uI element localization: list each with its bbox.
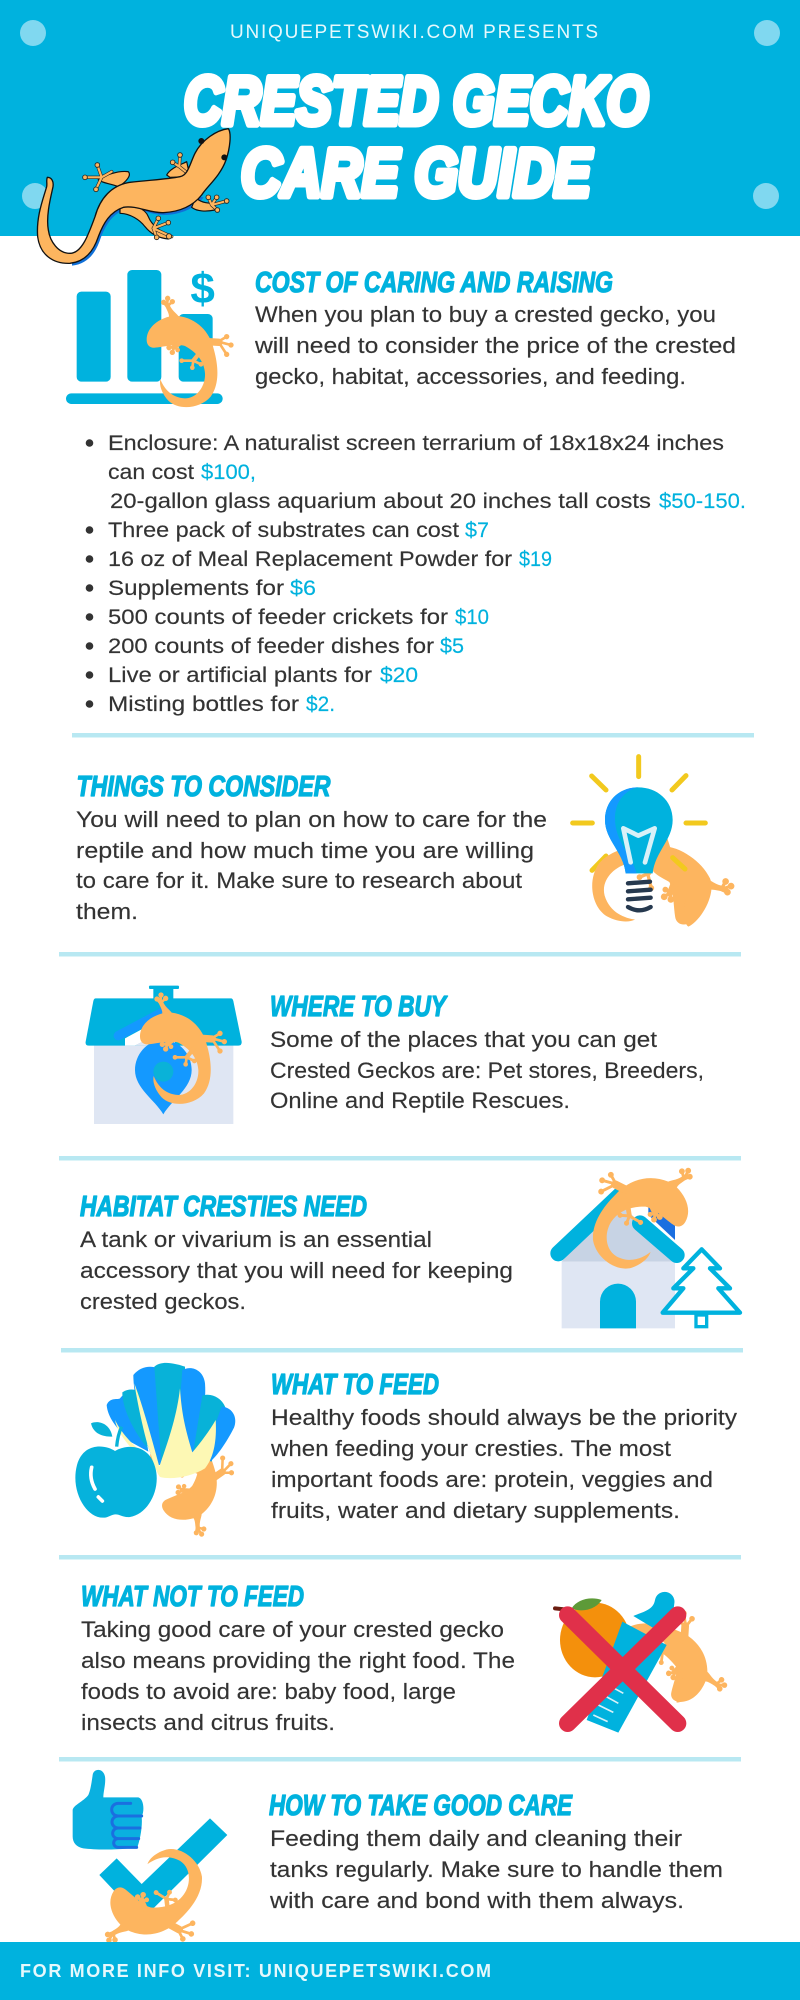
panel: things to consider bbox=[76, 757, 741, 944]
icon: house with location pin and gecko bbox=[86, 986, 242, 1124]
price list: Enclosure: A naturalist screen terrarium of 18x18x24 inches bbox=[108, 432, 724, 455]
price list: $5 bbox=[440, 635, 464, 658]
body text: what not to feed: foods to avoid are: baby food, large bbox=[81, 1679, 456, 1704]
icon: house, tree and gecko bbox=[558, 1132, 740, 1328]
body text: habitat: accessory that you will need for keeping bbox=[80, 1258, 513, 1283]
heading: habitat: HABITAT CRESTIES NEED bbox=[80, 1191, 367, 1223]
body text: what not to feed: Taking good care of your crested gecko bbox=[81, 1617, 504, 1642]
body text: where to buy: Some of the places that you can get bbox=[270, 1027, 658, 1052]
footer text: FOR MORE INFO VISIT: UNIQUEPETSWIKI.COM bbox=[20, 1961, 491, 1981]
body text: what to feed: fruits, water and dietary supplements. bbox=[271, 1498, 680, 1523]
body text: habitat bbox=[80, 1227, 513, 1314]
panel: cost of caring and raising bbox=[66, 264, 746, 716]
body text: cost intro bbox=[254, 302, 736, 389]
price list: Misting bottles for bbox=[108, 693, 299, 716]
icon: bar chart with dollar and gecko: $ bbox=[190, 264, 215, 313]
body text: where to buy bbox=[270, 1027, 704, 1113]
body text: what to feed: when feeding your cresties. The most bbox=[270, 1436, 672, 1461]
presenter line: UNIQUEPETSWIKI.COM PRESENTS bbox=[230, 22, 598, 43]
panel: habitat cresties need bbox=[80, 1132, 740, 1328]
header banner bbox=[0, 0, 800, 236]
price list: $19 bbox=[519, 548, 552, 571]
icon: apple, lettuce and gecko bbox=[75, 1363, 258, 1547]
body text: things to consider: them. bbox=[76, 899, 138, 924]
price list: Three pack of substrates can cost bbox=[108, 519, 459, 542]
price list: Live or artificial plants for bbox=[108, 664, 372, 687]
price list: $100, bbox=[201, 461, 256, 484]
panel: what to feed bbox=[75, 1363, 738, 1547]
title: CARE GUIDE bbox=[241, 135, 593, 211]
heading: things to consider: THINGS TO CONSIDER bbox=[76, 771, 331, 803]
heading: how to take good care: HOW TO TAKE GOOD CARE bbox=[269, 1790, 573, 1822]
body text: what to feed bbox=[270, 1405, 738, 1523]
body text: what not to feed: also means providing the right food. The bbox=[81, 1648, 515, 1673]
price list: 500 counts of feeder crickets for bbox=[108, 606, 448, 629]
body text: habitat: A tank or vivarium is an essential bbox=[80, 1227, 432, 1252]
panel: where to buy bbox=[86, 986, 704, 1124]
body text: how to take good care: Feeding them daily and cleaning their bbox=[270, 1826, 683, 1851]
body text: where to buy: Crested Geckos are: Pet stores, Breeders, bbox=[270, 1058, 704, 1083]
heading: where to buy: WHERE TO BUY bbox=[270, 991, 448, 1023]
price list: $10 bbox=[455, 606, 489, 629]
price list: $50-150. bbox=[659, 490, 746, 513]
body text: cost intro: will need to consider the price of the crested bbox=[254, 333, 736, 358]
title: CRESTED GECKO bbox=[184, 63, 648, 139]
title bbox=[184, 63, 648, 211]
body text: how to take good care: with care and bond with them always. bbox=[269, 1888, 684, 1913]
price list: can cost bbox=[108, 461, 194, 484]
price list: $6 bbox=[290, 577, 316, 600]
panel: how to take good care bbox=[73, 1770, 723, 1979]
icon: header gecko bbox=[37, 129, 230, 266]
icon: crossed-out orange, bottle and gecko bbox=[555, 1592, 736, 1733]
heading: what not to feed: WHAT NOT TO FEED bbox=[81, 1581, 304, 1613]
body text: where to buy: Online and Reptile Rescues. bbox=[270, 1088, 570, 1113]
heading: what to feed: WHAT TO FEED bbox=[271, 1369, 439, 1401]
body text: what to feed: Healthy foods should always be the priority bbox=[271, 1405, 738, 1430]
body text: cost intro: gecko, habitat, accessories, and feeding. bbox=[255, 364, 686, 389]
decorative corner dots bbox=[20, 20, 780, 209]
body text: things to consider: to care for it. Make sure to research about bbox=[76, 868, 523, 893]
body text: how to take good care bbox=[269, 1826, 723, 1913]
body text: cost intro: When you plan to buy a crested gecko, you bbox=[255, 302, 716, 327]
price list bbox=[86, 432, 746, 716]
price list: 16 oz of Meal Replacement Powder for bbox=[108, 548, 512, 571]
body text: things to consider bbox=[76, 807, 547, 924]
body text: what not to feed bbox=[81, 1617, 515, 1735]
body text: things to consider: reptile and how much time you are willing bbox=[76, 838, 534, 863]
body text: how to take good care: tanks regularly. Make sure to handle them bbox=[270, 1857, 723, 1882]
price list: $7 bbox=[465, 519, 489, 542]
icon: light bulb with gecko bbox=[573, 757, 741, 944]
icon: bar chart with dollar and gecko bbox=[66, 264, 234, 407]
body text: what to feed: important foods are: protein, veggies and bbox=[271, 1467, 713, 1492]
price list: 200 counts of feeder dishes for bbox=[108, 635, 434, 658]
heading: cost: COST OF CARING AND RAISING bbox=[255, 267, 613, 299]
price list: $20 bbox=[380, 664, 418, 687]
body text: habitat: crested geckos. bbox=[80, 1289, 246, 1314]
body text: things to consider: You will need to plan on how to care for the bbox=[76, 807, 547, 832]
price list: 20-gallon glass aquarium about 20 inches tall costs bbox=[110, 490, 651, 513]
footer band bbox=[0, 1942, 800, 2000]
panel: what not to feed bbox=[81, 1581, 736, 1735]
icon: thumbs up, check mark and gecko bbox=[73, 1770, 228, 1979]
price list: $2. bbox=[306, 693, 335, 716]
body text: what not to feed: insects and citrus fruits. bbox=[81, 1710, 335, 1735]
price list: Supplements for bbox=[108, 577, 284, 600]
